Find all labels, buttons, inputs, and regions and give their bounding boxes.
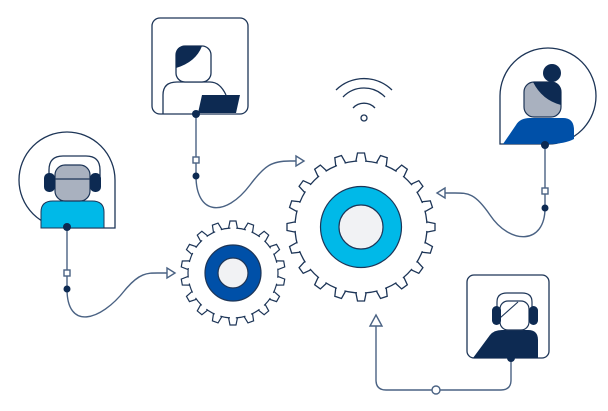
small gear — [181, 221, 285, 325]
avatar: right woman — [500, 48, 596, 149]
avatar: left headset person — [19, 132, 115, 231]
avatar: laptop person — [152, 18, 248, 118]
connector: left person to small gear — [64, 228, 175, 317]
big gear — [287, 153, 435, 301]
connector: bottom person to big gear — [370, 315, 511, 394]
connector: right person to big gear — [437, 144, 548, 237]
connector: laptop person to big gear — [192, 114, 304, 208]
avatar: bottom headset person — [467, 275, 549, 362]
icon: wifi — [336, 79, 392, 121]
